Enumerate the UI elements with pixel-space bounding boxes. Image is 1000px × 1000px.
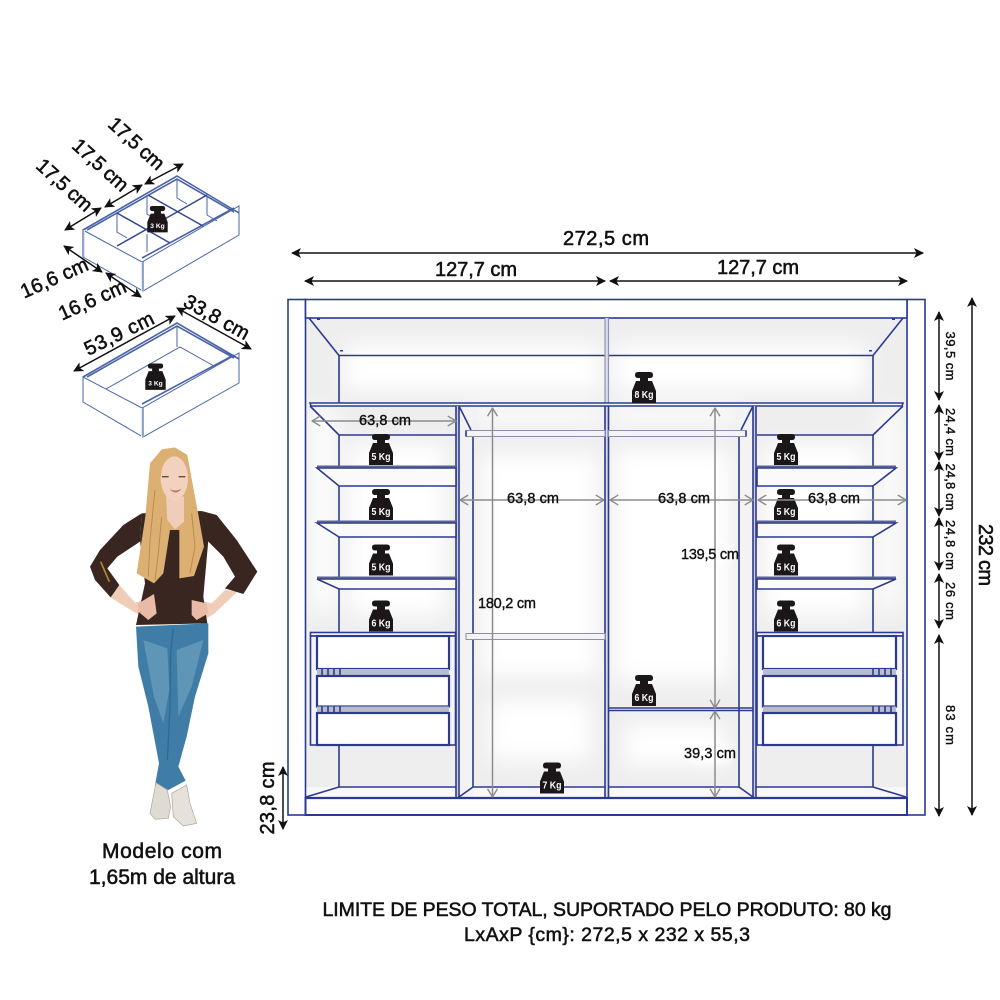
eyes bbox=[162, 475, 185, 479]
weight: 7 Kg floor bbox=[540, 762, 564, 794]
hair bbox=[137, 447, 204, 583]
weight: 3 Kg drawer 2: 3 Kg bbox=[148, 381, 163, 388]
drawer with dividers dimensions: 16,6 cm bbox=[55, 276, 130, 325]
label: 63,8 cm hanging right: 63,8 cm bbox=[658, 491, 710, 507]
centre divider bbox=[605, 318, 608, 798]
weight: 6 Kg centre shelf: 6 Kg bbox=[634, 693, 654, 704]
dimension: 180,2 height bbox=[492, 408, 494, 797]
label: 63,8 cm left top: 63,8 cm bbox=[359, 413, 411, 429]
right side panel bbox=[739, 406, 756, 798]
hair strands bbox=[148, 490, 195, 580]
dimension: width hanging left bbox=[460, 499, 604, 501]
left sleeve bbox=[90, 513, 142, 597]
weight: 5 Kg left 3: 5 Kg bbox=[372, 562, 390, 574]
dimension: shelf width left top bbox=[312, 420, 456, 422]
weight: 5 Kg left 1: 5 Kg bbox=[372, 452, 390, 463]
right drawer unit bbox=[757, 632, 903, 745]
drawer with dividers dimensions bbox=[17, 113, 183, 325]
weight: 6 Kg right: 6 Kg bbox=[776, 618, 796, 630]
grey inner dimensions bbox=[312, 408, 906, 797]
caption: overall dimensions: LxAxP {cm}: 272,5 x 232 x 55,3 bbox=[464, 924, 750, 946]
drawer with dividers bbox=[82, 176, 239, 291]
weight: 6 Kg right bbox=[774, 600, 798, 632]
panel: wardrobe bbox=[288, 300, 925, 815]
smile bbox=[169, 488, 182, 492]
weight: 6 Kg left: 6 Kg bbox=[372, 618, 390, 630]
top panel bbox=[306, 300, 907, 318]
label: 39,3 cm: 39,3 cm bbox=[684, 746, 736, 762]
left drawer unit bbox=[310, 632, 456, 745]
right shelves bbox=[757, 406, 903, 633]
weight: 3 Kg drawer 1: 3 Kg bbox=[150, 223, 165, 230]
weight: 5 Kg left 1 bbox=[369, 434, 393, 465]
left door bbox=[288, 300, 306, 815]
weight: 8 Kg bbox=[632, 372, 656, 403]
sleeve stripe bbox=[101, 562, 109, 582]
side heights dimensions: 39,5 cm bbox=[943, 332, 958, 380]
plinth height dimension: 23,8 cm bbox=[257, 762, 279, 834]
weight: 7 Kg floor: 7 Kg bbox=[542, 780, 562, 792]
weight: 3 Kg drawer 1 bbox=[147, 206, 168, 232]
face bbox=[161, 456, 188, 500]
weight: 8 Kg: 8 Kg bbox=[634, 390, 654, 401]
plain drawer dimensions: 33,8 cm bbox=[180, 291, 253, 345]
weight: 3 Kg drawer 2 bbox=[145, 364, 166, 390]
hands bbox=[137, 594, 208, 620]
left width dimension: 127,7 cm bbox=[435, 259, 517, 281]
plain drawer bbox=[83, 323, 239, 437]
weight: 6 Kg left bbox=[369, 600, 393, 632]
main shelf bbox=[310, 403, 903, 406]
jeans highlight bbox=[143, 640, 203, 723]
weight: 5 Kg left 3 bbox=[369, 544, 393, 576]
drawer with dividers dimensions: 17,5 cm bbox=[67, 135, 133, 196]
right sleeve bbox=[202, 511, 257, 594]
weight: 5 Kg right 2 bbox=[774, 489, 798, 520]
lower right shelf bbox=[608, 708, 753, 710]
side heights dimensions: 26 cm bbox=[943, 582, 958, 620]
plinth bbox=[306, 798, 907, 815]
model figure bbox=[90, 447, 257, 826]
dimension: 139,5 height bbox=[714, 408, 716, 708]
side heights dimensions bbox=[939, 312, 958, 816]
hanging rails bbox=[466, 430, 746, 640]
drawer with dividers dimensions: 17,5 cm bbox=[103, 113, 169, 175]
overall width dimension: 272,5 cm bbox=[563, 228, 649, 250]
caption: weight limit: LIMITE DE PESO TOTAL, SUPORTADO PELO PRODUTO: 80 kg bbox=[322, 899, 892, 921]
neck bbox=[166, 497, 184, 529]
side heights dimensions: 24,8 cm bbox=[943, 464, 958, 510]
weight: 6 Kg centre shelf bbox=[632, 675, 656, 706]
label: 139,5 cm: 139,5 cm bbox=[681, 547, 739, 563]
wardrobe interior shading bbox=[306, 318, 906, 798]
dimension: width shelves right bbox=[758, 499, 906, 501]
left side panel bbox=[456, 406, 473, 798]
left shelves bbox=[310, 406, 456, 633]
side heights dimensions: 24,8 cm bbox=[943, 520, 958, 570]
plain drawer dimensions: 53,9 cm bbox=[81, 308, 158, 360]
weight: 5 Kg right 2: 5 Kg bbox=[776, 507, 796, 518]
weight: 5 Kg left 2 bbox=[369, 489, 393, 520]
right width dimension: 127,7 cm bbox=[717, 257, 799, 279]
arms skin bbox=[109, 585, 237, 620]
weight: 5 Kg right 3 bbox=[774, 544, 798, 576]
plain drawer dimensions bbox=[74, 291, 253, 371]
label: 63,8 cm right: 63,8 cm bbox=[808, 491, 860, 507]
sweater body bbox=[136, 511, 208, 625]
caption: model height bbox=[89, 840, 235, 889]
label: 180,2 cm: 180,2 cm bbox=[478, 596, 536, 612]
right door bbox=[907, 300, 925, 815]
dimension: width hanging right bbox=[610, 499, 753, 501]
dimension: 39,3 height bbox=[714, 711, 716, 797]
label: 63,8 cm hanging left: 63,8 cm bbox=[507, 491, 559, 507]
floor lines bbox=[306, 745, 906, 797]
weight: 5 Kg right 1: 5 Kg bbox=[776, 452, 796, 463]
weight: 5 Kg left 2: 5 Kg bbox=[372, 507, 390, 518]
overall height dimension: 232 cm bbox=[974, 524, 996, 586]
drawer with dividers dimensions: 17,5 cm bbox=[31, 155, 97, 216]
jeans bbox=[136, 623, 208, 790]
side heights dimensions: 24,4 cm bbox=[943, 408, 958, 456]
left shoe bbox=[150, 783, 171, 819]
right shoe bbox=[172, 785, 197, 826]
top compartment structure bbox=[309, 318, 903, 403]
weight: 5 Kg right 1 bbox=[774, 434, 798, 465]
jeans fold bbox=[167, 628, 173, 760]
side heights dimensions: 83 cm bbox=[943, 705, 958, 745]
drawer with dividers dimensions: 16,6 cm bbox=[17, 254, 92, 303]
weight: 5 Kg right 3: 5 Kg bbox=[776, 562, 796, 574]
caption: model height: 1,65m de altura bbox=[89, 866, 235, 889]
caption: model height: Modelo com bbox=[102, 840, 222, 863]
